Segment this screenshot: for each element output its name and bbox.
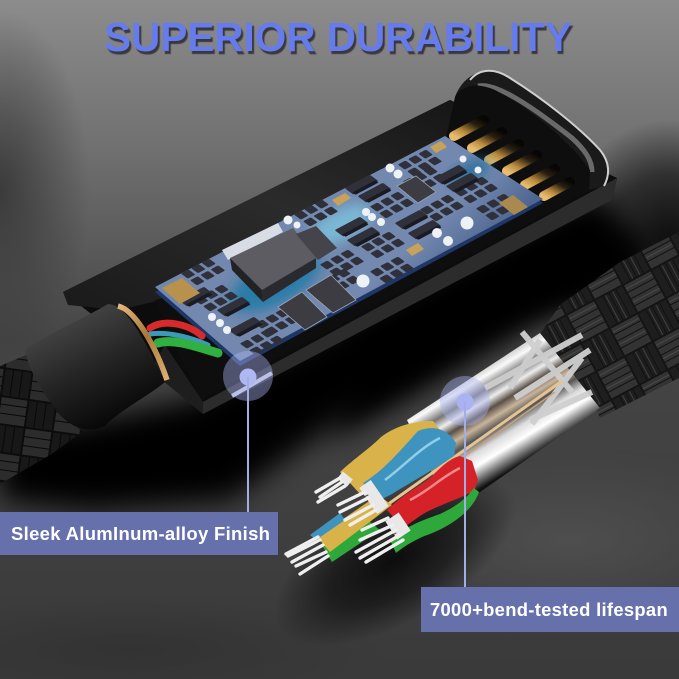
- callout label: bend-tested lifespan: 7000+bend-tested lifespan: [430, 599, 668, 620]
- callout label: bend-tested lifespan: [421, 587, 679, 632]
- main chip: [222, 223, 337, 302]
- callout label: aluminum finish: Sleek AlumInum-alloy Finish: [11, 523, 270, 544]
- small component clusters: [179, 150, 520, 355]
- capacitors white dots: [208, 156, 482, 334]
- gold connector pins: [454, 120, 570, 196]
- silver shield braid: [485, 332, 592, 424]
- yellow wire: [340, 421, 448, 494]
- board glow: [221, 153, 494, 325]
- lower yellow wire: [310, 495, 392, 552]
- shielded metal cable section: [407, 333, 600, 497]
- red wire: [387, 456, 478, 528]
- shadows beneath device: [0, 190, 640, 679]
- callout label: aluminum finish: [0, 512, 278, 555]
- gold solder pads: [162, 141, 528, 304]
- green wire: [323, 488, 479, 562]
- callout marker: aluminum finish: [223, 351, 273, 513]
- callout marker: bend-tested lifespan: [440, 376, 490, 588]
- right braided cable: [536, 232, 679, 418]
- circuit board: [155, 136, 543, 366]
- blue wire: [363, 428, 456, 499]
- silver conductor strands: [286, 475, 404, 574]
- black cable boot with gold ring: [25, 304, 167, 430]
- aluminum alloy tray housing: [63, 100, 617, 414]
- large integrated circuits: [278, 176, 436, 330]
- connector cap: [445, 71, 608, 205]
- title: SUPERIOR DURABILITY: [104, 14, 572, 60]
- cable wires entering board: [150, 323, 218, 353]
- left cable braid: [0, 355, 82, 484]
- gold drain wire: [387, 381, 562, 505]
